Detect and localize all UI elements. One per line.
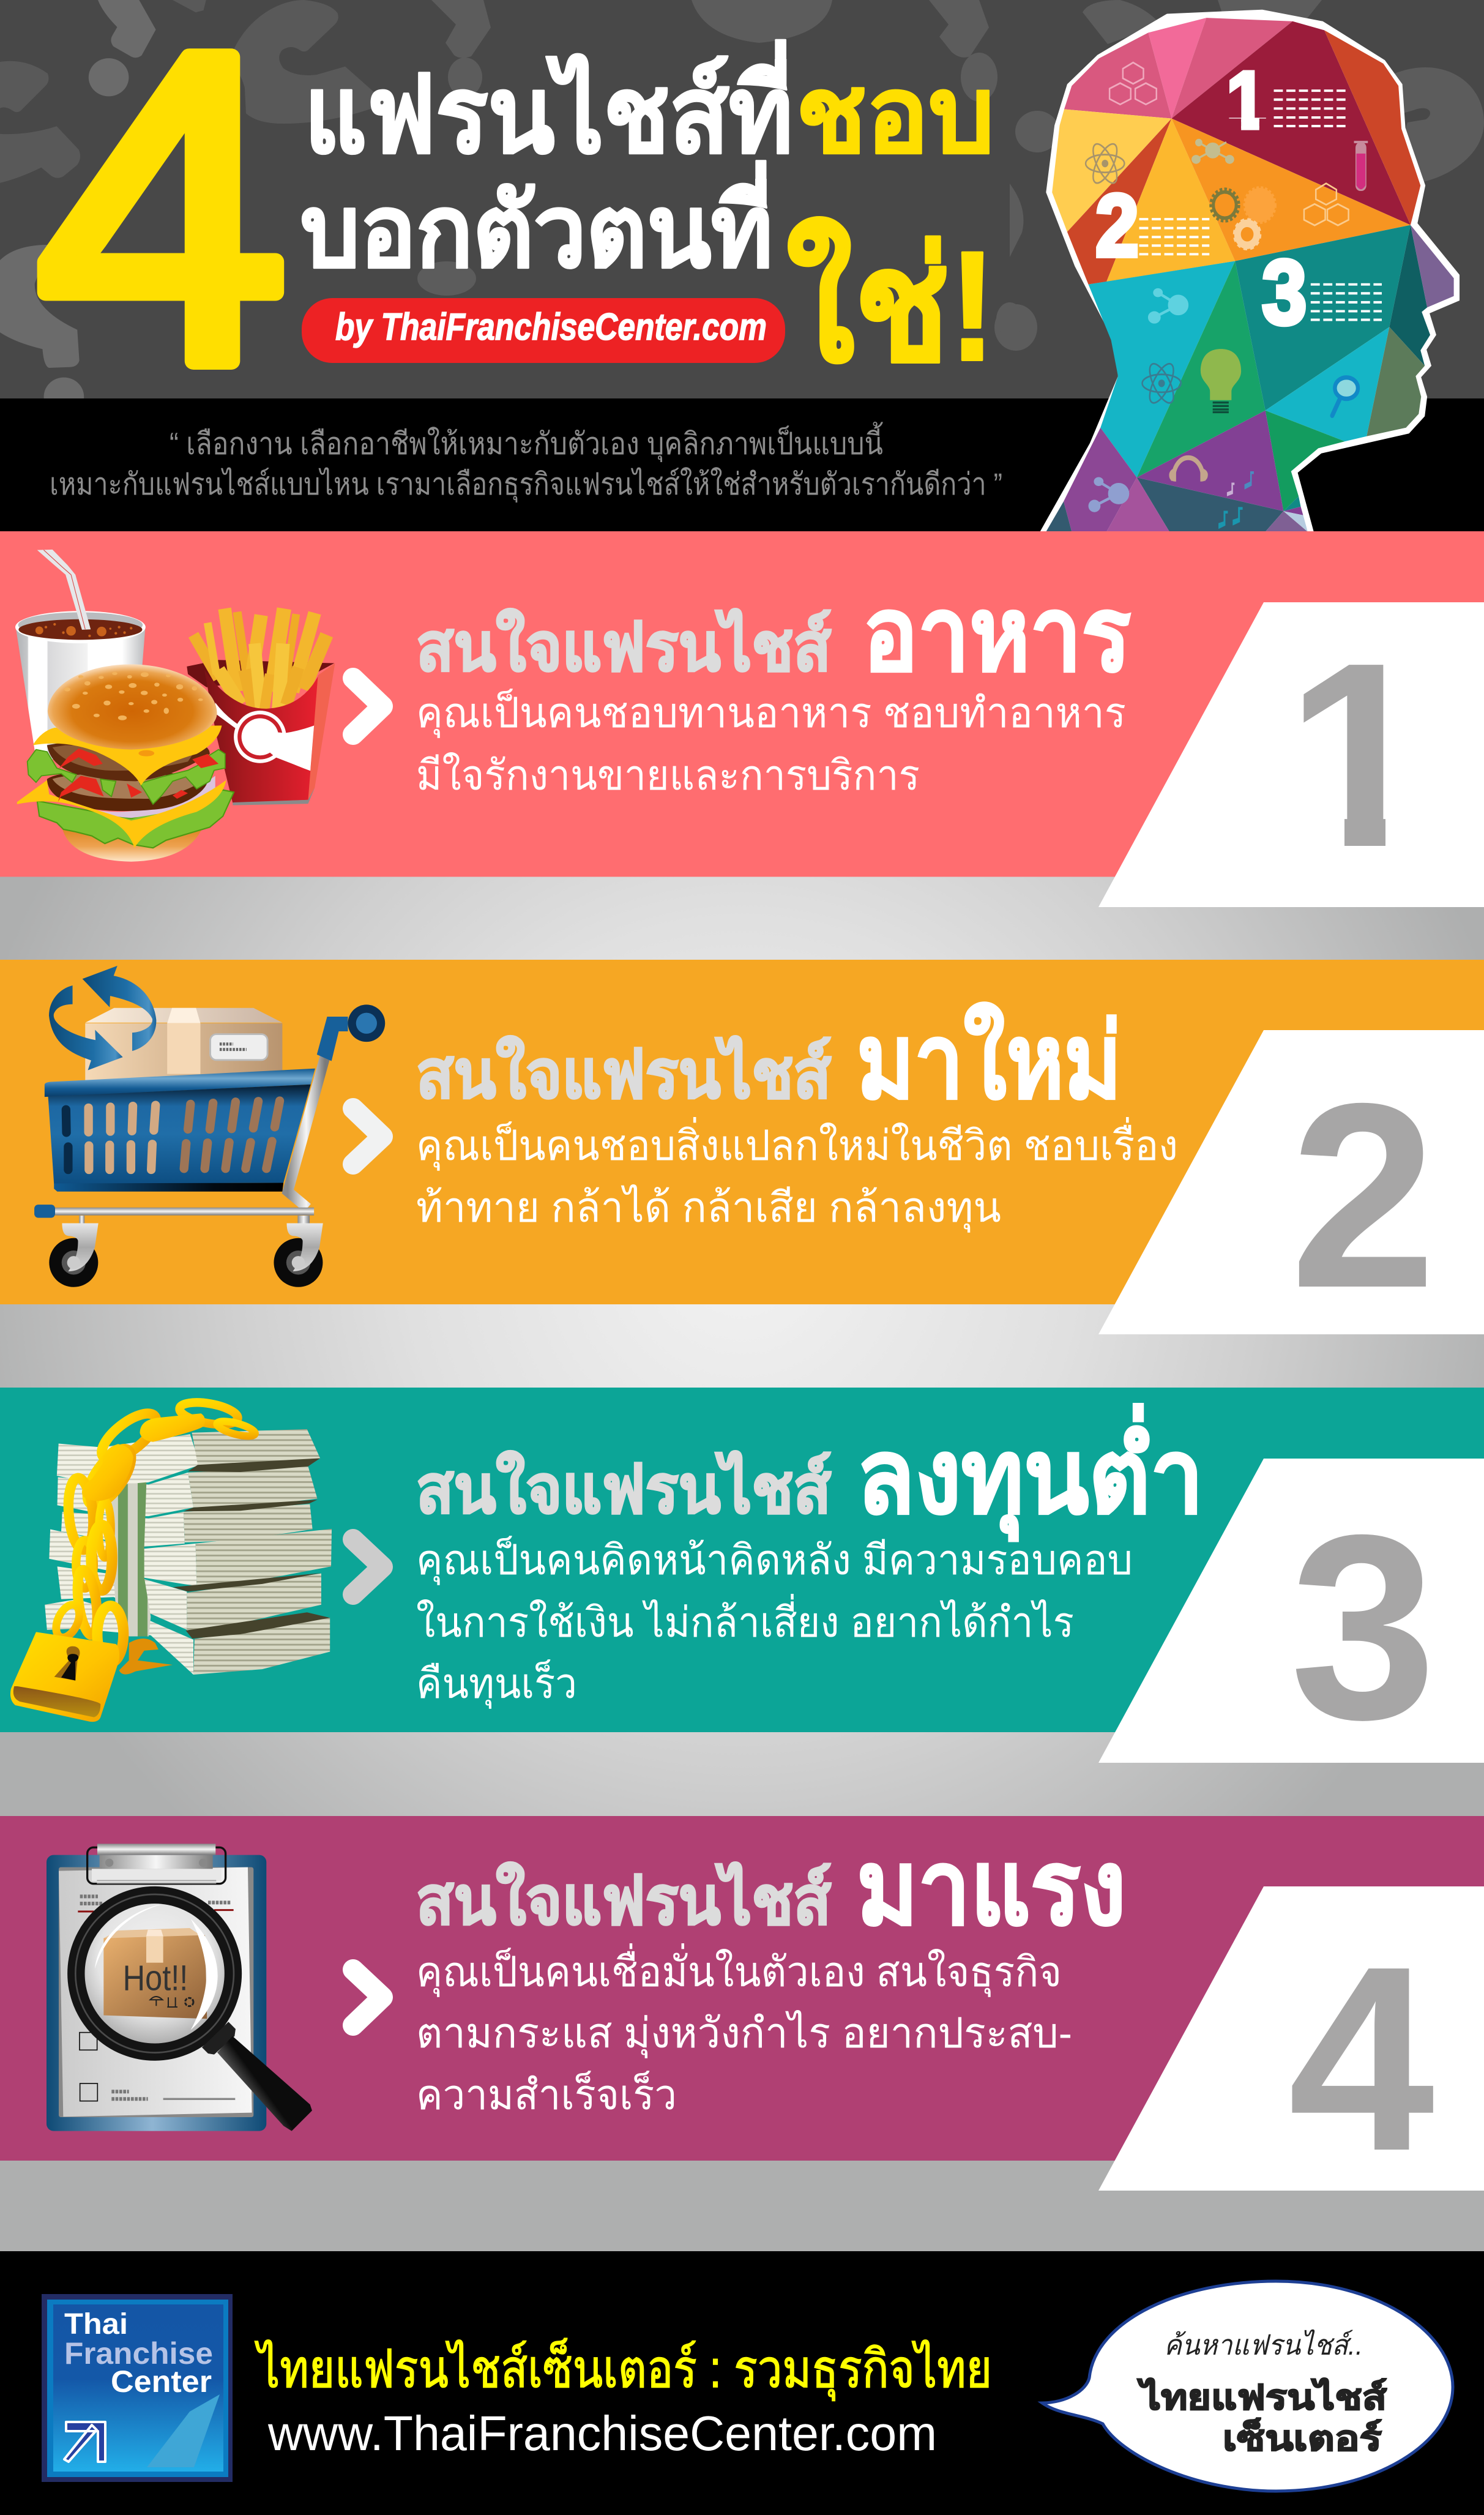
icon: molecule purple [1089,479,1128,511]
heading: สนใจแฟรนไชส์ ลงทุนต่ำ [416,1403,1204,1541]
title: line two: บอกตัวตนที่ [300,160,773,288]
tab: number 2 [1098,1030,1484,1343]
icon: hexagons orange [1304,184,1349,225]
heading: สนใจแฟรนไชส์ อาหาร: สนใจแฟรนไชส์ [416,608,832,685]
footer text: Thai Franchise Center headline: ไทยแฟรนไชส์เซ็นเตอร์ : รวมธุรกิจไทย [255,2338,992,2401]
text: description: คุณเป็นคนคิดหน้าคิดหลัง มีความรอบคอบ [416,1536,1133,1585]
heading: สนใจแฟรนไชส์ มาแรง [416,1830,1126,1946]
tab: number 3 [1098,1459,1484,1774]
heading: สนใจแฟรนไชส์ อาหาร [416,577,1131,693]
text: description [416,689,1126,799]
heading: สนใจแฟรนไชส์ มาใหม่ [416,1002,1122,1120]
icon: music notes [1218,471,1254,529]
panel 3: low investment [0,1388,1484,1774]
callout: speech bubble [1042,2281,1453,2491]
tab: number 1: 1 [1286,608,1432,902]
logo: Thai Franchise Center: Thai [64,2308,128,2341]
panel: header background [0,0,1484,416]
title: line one white: แฟรนไชส์ที่ [304,40,793,175]
heading: สนใจแฟรนไชส์ มาใหม่: สนใจแฟรนไชส์ [416,1036,832,1112]
logo: Thai Franchise Center: Center [111,2364,212,2399]
heading: สนใจแฟรนไชส์ มาแรง: สนใจแฟรนไชส์ [416,1862,832,1938]
icon: test tube [1354,141,1368,191]
icon: molecule orange [1193,140,1233,163]
logo: Thai Franchise Center: Franchise [64,2336,213,2371]
quote text: “ เลือกงาน เลือกอาชีพให้เหมาะกับตัวเอง บุคลิกภาพเป็นแบบนี้ [170,422,883,462]
badge: by ThaiFranchiseCenter.com [302,298,785,363]
label: number 3 on head: 3 [1262,241,1307,343]
panel: quote band [0,398,1484,531]
quote text [50,422,1002,503]
text: description: ตามกระแส มุ่งหวังกำไร อยากประสบ- [416,2009,1072,2058]
heading: สนใจแฟรนไชส์ มาใหม่: มาใหม่ [857,1002,1122,1120]
illustration: clipboard and magnifier: Hot!! [123,1959,188,1998]
panel: grey background gaps [0,875,1484,2251]
panel 4: trending [0,1816,1484,2206]
label: number 1 on head: 1 [1226,54,1266,146]
illustration: burger, fries and drink [15,550,335,862]
title: ใช่: ใช่! [786,217,996,394]
badge: by ThaiFranchiseCenter.com: by ThaiFranchiseCenter.com [335,306,767,348]
illustration: money stacks with padlock [10,1399,332,1722]
text: description [416,1943,1072,2118]
arrow: chevron [353,1539,382,1594]
text: search prompt: ค้นหาแฟรนไชส์.. [1164,2329,1363,2361]
icon: atom cyan [1143,360,1181,407]
text: description: ในการใช้เงิน ไม่กล้าเสี่ยง อยากได้กำไร [416,1594,1074,1646]
icon: gears [1212,188,1275,249]
text: description: คืนทุนเร็ว [416,1659,577,1709]
text: brand line two: เซ็นเตอร์ [1223,2417,1382,2457]
tab: number 2: 2 [1290,1049,1436,1343]
tab: number 4 [1098,1886,1484,2206]
icon: light bulb [1201,349,1241,412]
illustration: clipboard and magnifier [47,1844,312,2131]
text: description: ความสำเร็จเร็ว [416,2071,677,2118]
illustration: shopping cart [34,966,385,1287]
quote text: เหมาะกับแฟรนไชส์แบบไหน เรามาเลือกธุรกิจแฟรนไชส์ให้ใช่สำหรับตัวเรากันดีกว่า ” [50,467,1002,503]
title: line one yellow: ชอบ [796,56,994,175]
text: description: คุณเป็นคนชอบสิ่งแปลกใหม่ในชีวิต ชอบเรื่อง [416,1117,1178,1171]
panel 1: food [0,531,1484,907]
illustration: polygon head [1040,10,1460,532]
heading: สนใจแฟรนไชส์ ลงทุนต่ำ: ลงทุนต่ำ [857,1403,1204,1541]
logo: Thai Franchise Center [42,2294,233,2482]
heading: สนใจแฟรนไชส์ อาหาร: อาหาร [863,577,1131,693]
text: description [416,1536,1133,1709]
icon: hexagons top [1109,62,1157,105]
icon: magnifier [1332,378,1358,416]
text: description: มีใจรักงานขายและการบริการ [416,752,920,799]
heading: สนใจแฟรนไชส์ ลงทุนต่ำ: สนใจแฟรนไชส์ [416,1451,832,1527]
tab: number 4: 4 [1288,1912,1436,2206]
text: brand line one: ไทยแฟรนไชส์ [1137,2377,1387,2416]
arrow: chevron [353,1108,382,1164]
arrow: chevron [353,678,382,734]
panel: footer [0,2251,1484,2515]
label: number 2 on head: 2 [1095,176,1139,275]
tab: number 1 [1098,602,1484,907]
panel 2: new [0,960,1484,1343]
tab: number 3: 3 [1290,1481,1436,1774]
arrow: chevron [353,1970,382,2025]
icon: molecule cyan [1149,290,1187,322]
heading: สนใจแฟรนไชส์ มาแรง: มาแรง [857,1830,1126,1946]
text: description [416,1117,1178,1233]
text: description: คุณเป็นคนชอบทานอาหาร ชอบทำอาหาร [416,689,1126,738]
footer text: website: www.ThaiFranchiseCenter.com [267,2406,937,2461]
icon: headphones [1169,458,1208,482]
text: description: ท้าทาย กล้าได้ กล้าเสีย กล้าลงทุน [416,1184,1001,1233]
text: description: คุณเป็นคนเชื่อมั่นในตัวเอง สนใจธุรกิจ [416,1943,1062,1997]
icon: atom yellow [1086,140,1124,187]
